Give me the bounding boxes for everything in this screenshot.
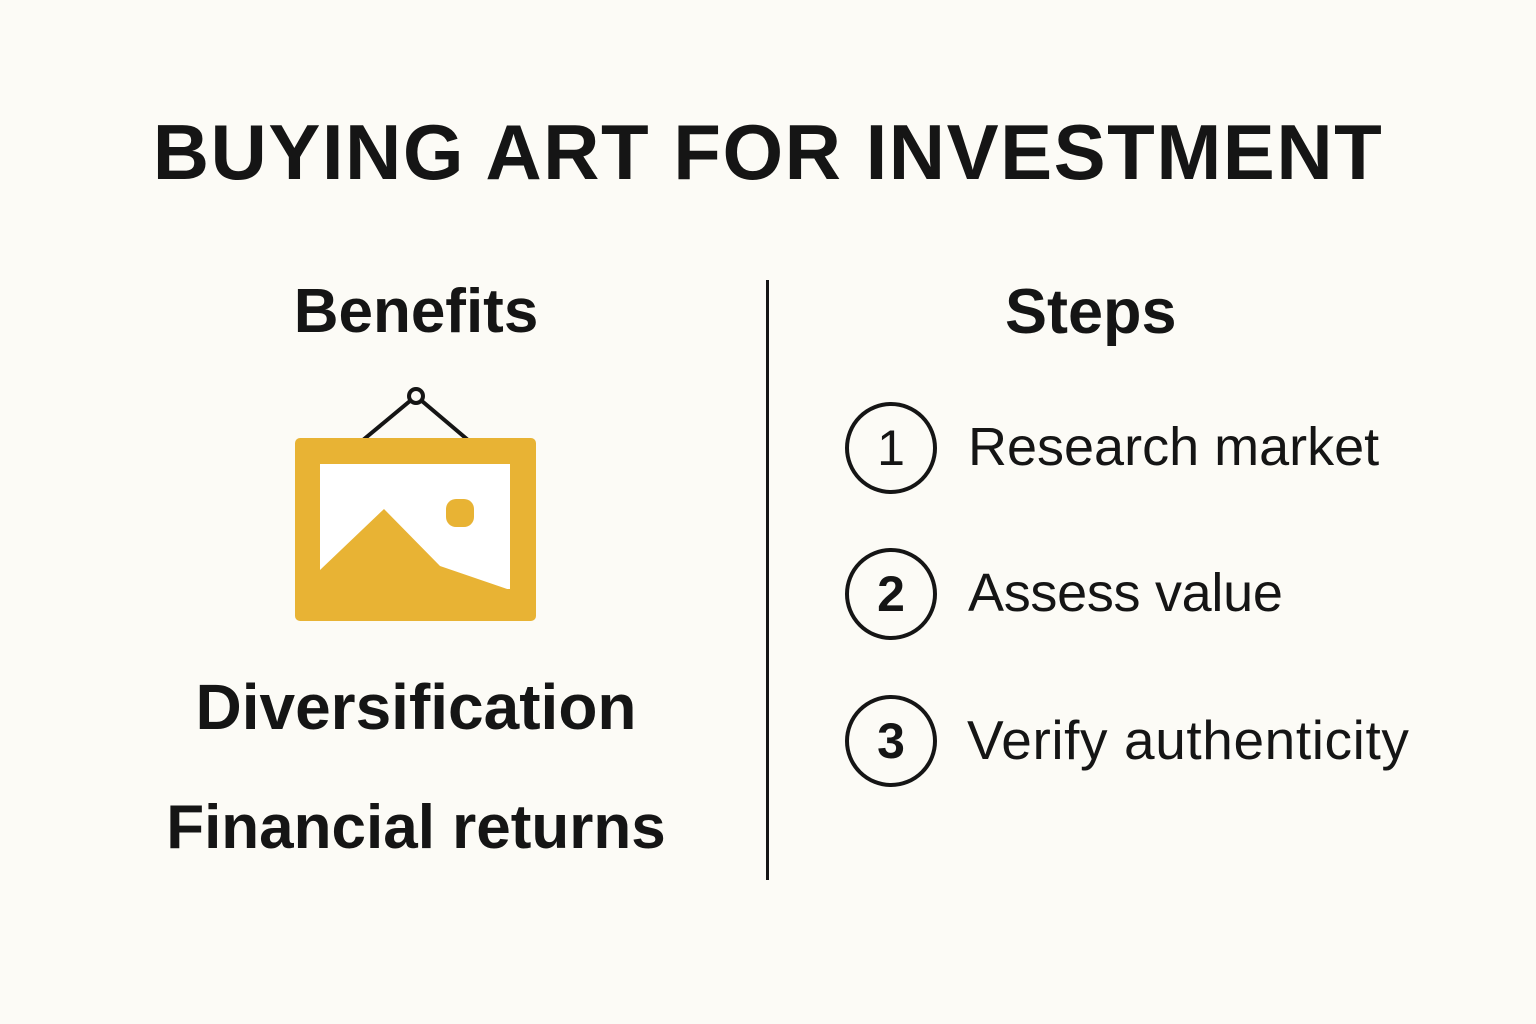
step 3: Verify authenticity bbox=[967, 709, 1409, 771]
step 2: 2 bbox=[877, 566, 905, 622]
step 3: 3 bbox=[877, 713, 905, 769]
icon: framed picture bbox=[295, 387, 536, 621]
heading: steps: Steps bbox=[1005, 277, 1177, 347]
step 1: Research market bbox=[968, 417, 1379, 477]
title: BUYING ART FOR INVESTMENT bbox=[153, 108, 1383, 196]
benefit: diversification: Diversification bbox=[195, 671, 637, 743]
step 1: 1 bbox=[877, 420, 905, 476]
step 1 bbox=[845, 402, 1379, 494]
heading: benefits: Benefits bbox=[294, 277, 538, 346]
divider bbox=[766, 280, 769, 880]
step 3 bbox=[845, 695, 1409, 787]
step 2: Assess value bbox=[968, 563, 1283, 623]
step 2 bbox=[845, 548, 1283, 640]
benefit: financial returns: Financial returns bbox=[166, 793, 666, 862]
